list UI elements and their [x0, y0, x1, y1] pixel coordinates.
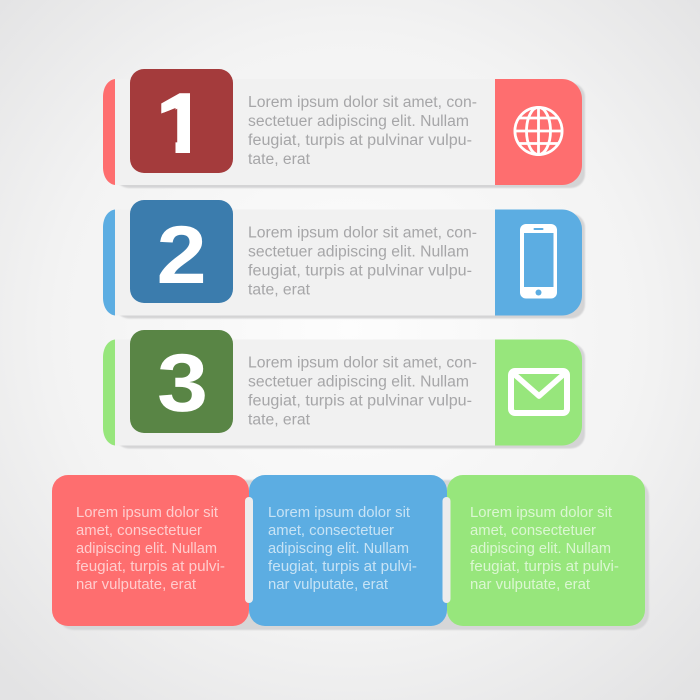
- card: blue: Lorem ipsum dolor sit: [268, 504, 411, 521]
- number badge 2: 2: [156, 210, 207, 301]
- card: green: adipiscing elit. Nullam: [470, 540, 611, 557]
- card: red: feugiat, turpis at pulvi-: [76, 558, 225, 575]
- description 1: Lorem ipsum dolor sit amet, con-: [248, 94, 477, 111]
- icon: smartphone: [520, 224, 557, 298]
- number badge 2: [130, 200, 233, 303]
- card: red: [52, 475, 249, 626]
- icon: globe: [515, 107, 562, 155]
- card shadow: [58, 480, 649, 630]
- description 2: feugiat, turpis at pulvinar vulpu-: [248, 262, 472, 280]
- description 3: tate, erat: [248, 412, 311, 428]
- panel: row 3: [103, 330, 585, 448]
- card: green: [447, 475, 645, 626]
- card: blue: adipiscing elit. Nullam: [268, 540, 409, 557]
- card: green: nar vulputate, erat: [470, 576, 591, 593]
- description 3: Lorem ipsum dolor sit amet, con-: [248, 354, 477, 372]
- description 3: sectetuer adipiscing elit. Nullam: [248, 374, 469, 390]
- card: blue: [249, 475, 447, 626]
- number badge 3: 3: [157, 338, 208, 429]
- card: blue: feugiat, turpis at pulvi-: [268, 558, 417, 575]
- left colour tab 3: [103, 340, 115, 446]
- description 1: sectetuer adipiscing elit. Nullam: [248, 113, 469, 130]
- number badge 1: 1: [157, 77, 211, 171]
- connector left: [245, 497, 253, 603]
- panel: bottom cards: [52, 475, 649, 630]
- card: green: feugiat, turpis at pulvi-: [470, 558, 619, 575]
- icon: envelope: [511, 371, 567, 413]
- card: green: Lorem ipsum dolor sit: [470, 504, 613, 521]
- description 2: Lorem ipsum dolor sit amet, con-: [248, 224, 477, 242]
- card: red: nar vulputate, erat: [76, 576, 197, 593]
- panel: row 1: [103, 69, 585, 188]
- card: red: Lorem ipsum dolor sit: [76, 504, 219, 521]
- number badge 1: [130, 69, 233, 173]
- description 1: tate, erat: [248, 151, 311, 168]
- icon panel 2: [495, 210, 582, 316]
- icon panel 3: [495, 340, 582, 446]
- description 2: tate, erat: [248, 282, 311, 298]
- left colour tab 1: [103, 79, 115, 185]
- text panel 3: [115, 340, 496, 446]
- text panel 1: [115, 79, 496, 185]
- card: green: amet, consectetuer: [470, 522, 596, 539]
- description 2: sectetuer adipiscing elit. Nullam: [248, 244, 469, 260]
- number badge 3: [130, 330, 233, 433]
- card: blue: nar vulputate, erat: [268, 576, 389, 593]
- panel: row 2: [103, 200, 585, 318]
- left colour tab 2: [103, 210, 115, 316]
- text panel 2: [115, 210, 496, 316]
- description 3: feugiat, turpis at pulvinar vulpu-: [248, 392, 472, 410]
- icon panel 1: [495, 79, 582, 185]
- card: red: amet, consectetuer: [76, 522, 202, 539]
- connector right: [442, 497, 450, 603]
- description 1: feugiat, turpis at pulvinar vulpu-: [248, 132, 472, 149]
- card: blue: amet, consectetuer: [268, 522, 394, 539]
- card: red: adipiscing elit. Nullam: [76, 540, 217, 557]
